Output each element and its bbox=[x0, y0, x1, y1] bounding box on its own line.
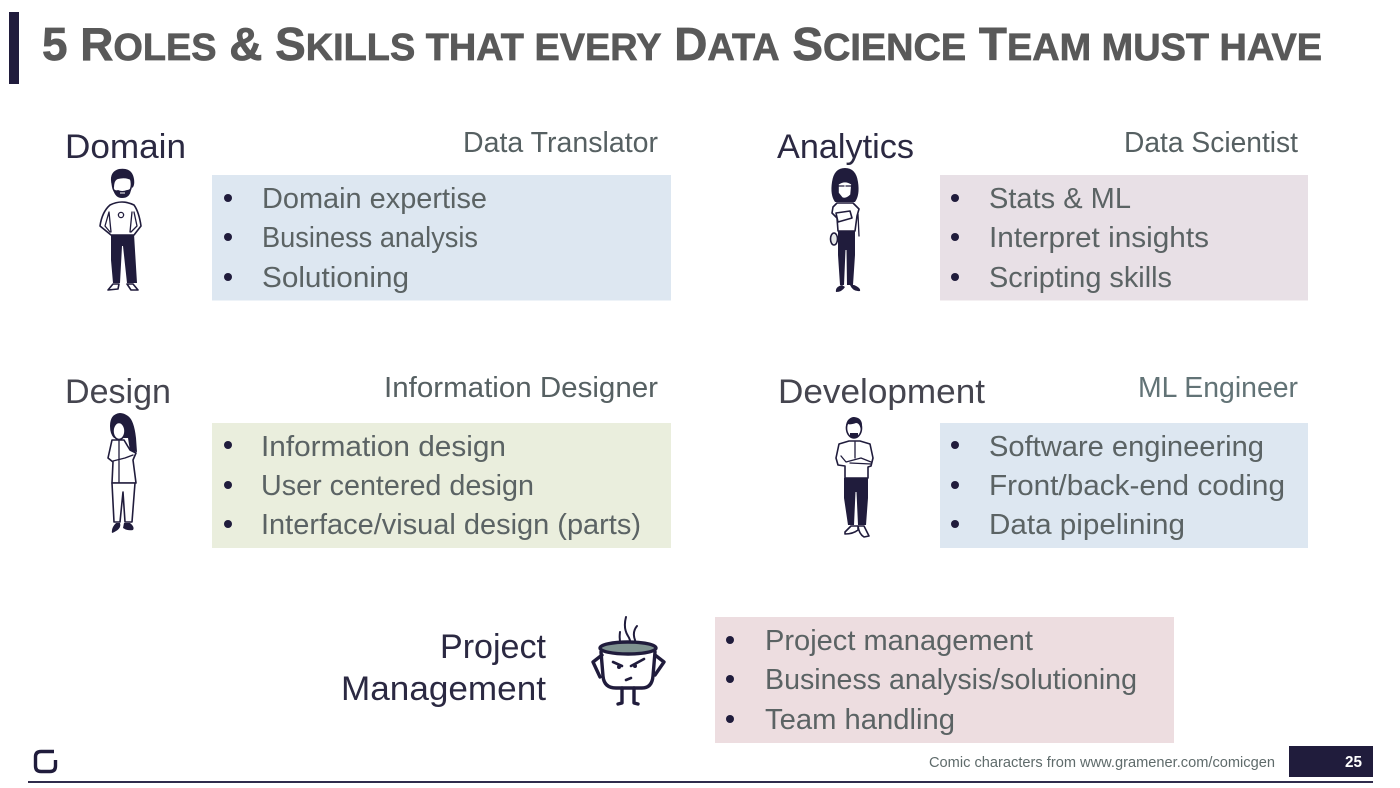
bullets: Analytics skills: Interpret insights bbox=[989, 222, 1209, 254]
footer credit: Comic characters from www.gramener.com/comicgen bbox=[929, 754, 1275, 771]
bullets: Project Management skills: Team handling bbox=[765, 704, 955, 736]
heading: Project Management: Project bbox=[440, 628, 547, 666]
bullets: Domain skills: Business analysis bbox=[262, 222, 478, 254]
panel: Domain bbox=[65, 127, 671, 300]
bullets: Development skills bbox=[951, 431, 1285, 541]
icon: Design character bbox=[108, 413, 137, 533]
heading: Development: Development bbox=[778, 373, 986, 411]
bullets: Analytics skills: Scripting skills bbox=[989, 262, 1172, 294]
bullets: Development skills: Front/back-end coding bbox=[989, 470, 1285, 502]
heading: Design: Design bbox=[65, 373, 171, 411]
footer logo bbox=[36, 752, 56, 772]
bullets: Design skills: Interface/visual design (parts) bbox=[261, 509, 641, 541]
bullets: Domain skills: Domain expertise bbox=[262, 183, 487, 215]
skills box bbox=[212, 175, 671, 300]
bullets: Design skills: Information design bbox=[261, 431, 506, 463]
heading: Analytics: Analytics bbox=[777, 128, 914, 166]
skills box bbox=[940, 175, 1308, 300]
icon: Development character bbox=[836, 417, 873, 537]
bullets: Domain skills: Solutioning bbox=[262, 262, 409, 294]
role: Data Scientist: Data Scientist bbox=[1124, 127, 1298, 159]
panel: Development bbox=[778, 372, 1308, 548]
heading: Project Management bbox=[341, 628, 547, 708]
panel: Project Management bbox=[341, 617, 1174, 743]
icon: Analytics character bbox=[830, 168, 860, 292]
skills box bbox=[940, 423, 1308, 548]
role: Data Translator: Data Translator bbox=[463, 127, 658, 159]
skills box bbox=[715, 617, 1174, 743]
title accent bar bbox=[9, 12, 19, 84]
panel: Design bbox=[65, 372, 671, 548]
bullets: Analytics skills: Stats & ML bbox=[989, 183, 1131, 215]
page number box: 25 bbox=[1345, 754, 1362, 771]
bullets: Design skills bbox=[224, 431, 641, 541]
bullets: Design skills: User centered design bbox=[261, 470, 534, 502]
title: 5 ROLES & SKILLS THAT EVERY DATA SCIENCE TEAM MUST HAVE bbox=[42, 18, 1322, 70]
bullets: Project Management skills bbox=[726, 625, 1137, 736]
footer rule bbox=[28, 781, 1373, 783]
heading: Domain: Domain bbox=[65, 128, 186, 166]
icon: Domain character bbox=[100, 169, 141, 290]
bullets: Project Management skills: Project management bbox=[765, 625, 1033, 657]
bullets: Project Management skills: Business analysis/solutioning bbox=[765, 664, 1137, 696]
panel: Analytics bbox=[777, 127, 1308, 300]
bullets: Development skills: Software engineering bbox=[989, 431, 1264, 463]
role: ML Engineer: ML Engineer bbox=[1138, 372, 1298, 404]
page number box bbox=[1289, 746, 1373, 777]
icon: angry coffee cup bbox=[593, 617, 664, 704]
bullets: Domain skills bbox=[224, 183, 487, 294]
bullets: Analytics skills bbox=[951, 183, 1209, 294]
skills box bbox=[212, 423, 671, 548]
heading: Project Management: Management bbox=[341, 670, 547, 708]
role: Information Designer: Information Designer bbox=[384, 372, 658, 404]
bullets: Development skills: Data pipelining bbox=[989, 509, 1185, 541]
